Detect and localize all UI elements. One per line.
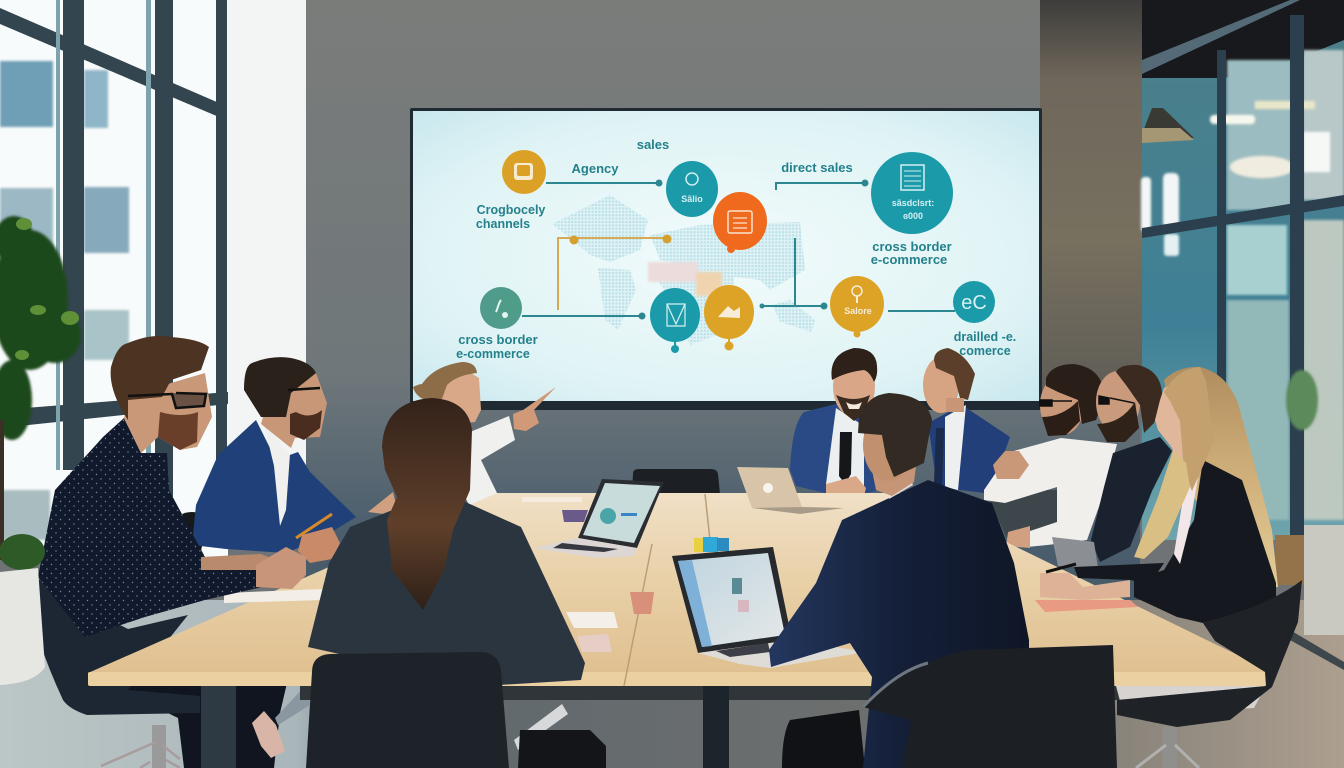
screen labels: Crogbocely: [477, 203, 545, 217]
jacket: [1091, 437, 1172, 562]
forearm skin: [201, 554, 281, 570]
node: green: [480, 287, 522, 329]
tablet: [1052, 537, 1098, 568]
screen labels: [456, 137, 1016, 361]
beard: [1097, 402, 1139, 442]
man in white shirt: [984, 364, 1117, 548]
man centre-right in blue jacket: [923, 348, 1010, 493]
hair: [111, 336, 209, 420]
notebook right: [1035, 600, 1138, 612]
notebook left: [224, 589, 323, 603]
hair: [413, 362, 477, 407]
distant plant: [1286, 370, 1318, 430]
man in blue jacket beneath screen: [790, 348, 896, 506]
glasses: [1099, 396, 1134, 404]
front chair right: [863, 645, 1117, 768]
logo: [763, 483, 773, 493]
lower hand on table: [526, 526, 556, 540]
background chair: [632, 469, 720, 494]
hand raised: [993, 451, 1029, 479]
neck: [946, 398, 964, 412]
white shirt: [264, 424, 290, 526]
sticky blocks: [694, 537, 729, 552]
smile: [846, 402, 862, 409]
glass frame: [1142, 15, 1344, 535]
wall-mounted screen: [410, 108, 1042, 410]
face: [1155, 378, 1197, 470]
right chair post: [1136, 727, 1199, 768]
screen bezel: [410, 108, 1042, 410]
pens: [296, 514, 332, 538]
neck: [872, 466, 916, 496]
face: [923, 357, 959, 413]
lid: [672, 547, 792, 653]
lid: [737, 467, 803, 510]
woman presenter: [368, 362, 556, 540]
back: [863, 645, 1117, 768]
trunk: [0, 420, 4, 560]
node: yellow top-left: [502, 150, 546, 194]
laptop: silver apple: [737, 467, 844, 514]
white notepad: [566, 612, 618, 628]
front man: [769, 393, 1029, 768]
screen labels: drailled -e.: [954, 330, 1016, 344]
blonde lock: [1134, 450, 1190, 559]
window frame: [0, 0, 228, 520]
pen: [1046, 564, 1076, 572]
concrete wall: [305, 0, 1140, 620]
man 2 in blue jacket: [192, 357, 356, 563]
shirt: [38, 418, 262, 637]
hair: [934, 348, 975, 400]
pointing hand: [513, 387, 556, 431]
pendant lamp: [1142, 108, 1194, 143]
front woman: [308, 398, 585, 686]
shirt: [984, 438, 1117, 547]
forearm and hand: [1040, 573, 1130, 600]
jacket: [790, 404, 896, 498]
laptop: open with app screen: [533, 479, 664, 558]
hand: [298, 527, 340, 563]
hand: [826, 476, 866, 506]
hair: [1046, 364, 1104, 424]
phone: [577, 634, 612, 652]
hair: [1116, 365, 1162, 433]
keyboard base: [533, 538, 637, 558]
screen labels: e-commerce: [871, 252, 947, 267]
ceiling: [1142, 0, 1344, 78]
screen labels: comerce: [959, 344, 1011, 358]
front chair arm: [514, 704, 568, 750]
trousers under chair: [518, 730, 606, 768]
chair post: [152, 725, 166, 768]
hair front: [1164, 367, 1214, 491]
white column: [228, 0, 306, 520]
hand on table: [1006, 526, 1030, 548]
screen labels: e-commerce: [456, 347, 530, 361]
node: eC: [953, 281, 995, 323]
screen labels: channels: [476, 217, 530, 231]
node: big teal: ɞ000: [903, 211, 923, 221]
jacket: [769, 480, 1029, 768]
hair: [244, 357, 316, 417]
screen labels: cross border: [458, 332, 538, 347]
node: orange: [713, 192, 767, 253]
blouse: [1174, 466, 1200, 564]
blonde woman: [1040, 367, 1276, 716]
table top: [88, 493, 1268, 680]
jacket: [1134, 460, 1276, 623]
screen surface: [413, 111, 1039, 401]
seat trousers: [1116, 686, 1266, 716]
bare ankle: [252, 711, 285, 758]
face: [1040, 375, 1084, 435]
floor strip: [1290, 630, 1344, 670]
base: [752, 507, 844, 514]
head: [863, 409, 913, 481]
back of blonde woman's hair: [1164, 367, 1278, 587]
world map: [552, 195, 815, 345]
leaves: [0, 216, 81, 440]
lid: [578, 479, 664, 548]
low shrub: [0, 534, 45, 570]
right chair: [1117, 580, 1302, 727]
connector lines: [522, 183, 955, 316]
glasses: [288, 388, 320, 390]
rim highlight: [863, 663, 928, 707]
table items: [224, 497, 1138, 652]
wooden planter: [1275, 535, 1315, 585]
grey trouser far leg: [275, 683, 310, 725]
under table shadow: [300, 686, 1120, 700]
panel seams: [624, 494, 710, 686]
hands: [256, 547, 306, 589]
floor: [0, 600, 1344, 768]
reflections: [1141, 50, 1344, 520]
man in dark jacket: [1091, 365, 1172, 562]
neck and face: [124, 373, 212, 453]
glasses: [128, 393, 206, 408]
table front edge: [88, 672, 1266, 686]
conference table: [88, 493, 1268, 768]
screen labels: cross border: [872, 239, 952, 254]
beard: [158, 412, 198, 450]
screen labels: sales: [637, 137, 669, 152]
concrete pillar right: [1040, 0, 1142, 400]
beard: [290, 410, 322, 440]
laptop: front: [672, 547, 866, 668]
face: [436, 370, 481, 424]
hair: [831, 348, 877, 382]
tie: [934, 428, 944, 486]
node: teal sales: Sãlio: [681, 194, 703, 204]
left office chair: [28, 579, 310, 768]
pot: [0, 568, 45, 685]
left window: [0, 0, 228, 560]
face: [261, 373, 327, 448]
chair behind man 2: [174, 512, 206, 556]
node: big teal: [871, 152, 953, 234]
plant and pot: [0, 216, 81, 685]
jacket: [928, 405, 1010, 493]
small papers on table: [522, 497, 582, 502]
node: big teal: sãsdclsrt:: [892, 198, 934, 208]
display: [583, 483, 660, 543]
jacket: [192, 420, 356, 553]
tie: [839, 432, 852, 484]
shirt: [826, 408, 864, 488]
node: yellow tailed: [704, 285, 754, 350]
beard: [836, 395, 870, 421]
shirt: [945, 405, 966, 490]
jacket: [308, 500, 585, 686]
cup: [630, 592, 654, 614]
distant building windows: [0, 61, 129, 540]
collar: [887, 479, 913, 499]
face: [1096, 371, 1140, 433]
shirt body and arm: [449, 416, 521, 507]
face: [833, 357, 875, 417]
elbow: [368, 492, 399, 516]
node: yellow salore: Salore: [844, 306, 872, 316]
man 1 in dotted shirt: [38, 336, 306, 637]
hair and ponytail: [382, 398, 472, 610]
screen labels: Agency: [572, 161, 619, 176]
table legs: [201, 686, 236, 768]
dark wall recess behind right table edge: [985, 490, 1060, 545]
right glass wall: [1141, 0, 1344, 670]
chair shell: [28, 579, 200, 715]
sleeve: [1074, 563, 1164, 584]
node: teal sales: [666, 161, 718, 217]
node: eC: eC: [961, 292, 987, 314]
node: yellow salore: [830, 276, 884, 338]
ceiling beam: [1142, 0, 1300, 74]
screen labels: direct sales: [781, 160, 853, 175]
display: [678, 553, 785, 647]
thumbnails: [732, 578, 742, 594]
beard: [1042, 401, 1080, 436]
trousers: [107, 683, 287, 768]
glasses: [1040, 400, 1072, 406]
hair: [858, 393, 932, 477]
chart on display: [600, 508, 616, 524]
blurred centre patch: [648, 262, 722, 296]
bag at floor: [782, 710, 865, 768]
front chair: [306, 652, 509, 768]
node: teal tailed: [650, 288, 700, 353]
base: [698, 640, 866, 668]
